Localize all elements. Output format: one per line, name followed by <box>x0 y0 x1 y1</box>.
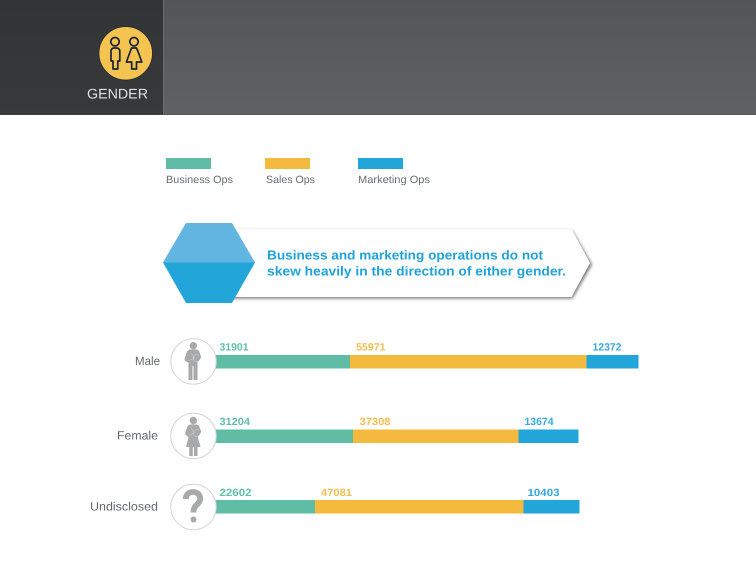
value: undisclosed sales ops: 47081 <box>321 487 352 499</box>
stacked bar: female <box>215 430 578 443</box>
heading: gender: GENDER <box>87 86 148 102</box>
callout: text: skew heavily in the direction of either gender. <box>267 264 566 278</box>
chart row: undisclosed <box>90 484 580 530</box>
legend: business ops: Business Ops <box>166 174 233 186</box>
legend: marketing ops <box>358 158 430 186</box>
legend: business ops <box>166 158 233 186</box>
chart row: male <box>135 339 638 384</box>
label: male: Male <box>135 354 160 368</box>
value: female business ops: 31204 <box>220 416 250 428</box>
callout: text: Business and marketing operations do not <box>267 248 544 262</box>
icon: gender <box>99 27 152 80</box>
icon: male figure <box>171 339 216 384</box>
value: female sales ops: 37308 <box>360 416 391 428</box>
label: undisclosed: Undisclosed <box>90 500 158 514</box>
callout: hexagon <box>163 223 255 303</box>
stacked bar: undisclosed <box>215 500 580 514</box>
value: male marketing ops: 12372 <box>592 342 622 354</box>
value: male business ops: 31901 <box>220 342 249 354</box>
value: male sales ops: 55971 <box>356 342 386 354</box>
legend: marketing ops: Marketing Ops <box>358 174 430 186</box>
legend: sales ops <box>265 158 315 186</box>
icon: question mark <box>171 484 216 530</box>
legend <box>166 158 430 186</box>
label: female: Female <box>117 428 158 442</box>
callout: arrow banner <box>232 229 592 298</box>
header band <box>0 0 756 115</box>
value: undisclosed marketing ops: 10403 <box>528 487 560 499</box>
legend: sales ops: Sales Ops <box>266 174 315 186</box>
value: female marketing ops: 13674 <box>524 416 554 428</box>
value: undisclosed business ops: 22602 <box>220 487 252 499</box>
callout: text <box>267 248 566 278</box>
stacked bar: male <box>215 355 638 368</box>
callout <box>163 223 592 303</box>
icon: female figure <box>171 413 216 459</box>
chart row: female <box>117 413 578 459</box>
